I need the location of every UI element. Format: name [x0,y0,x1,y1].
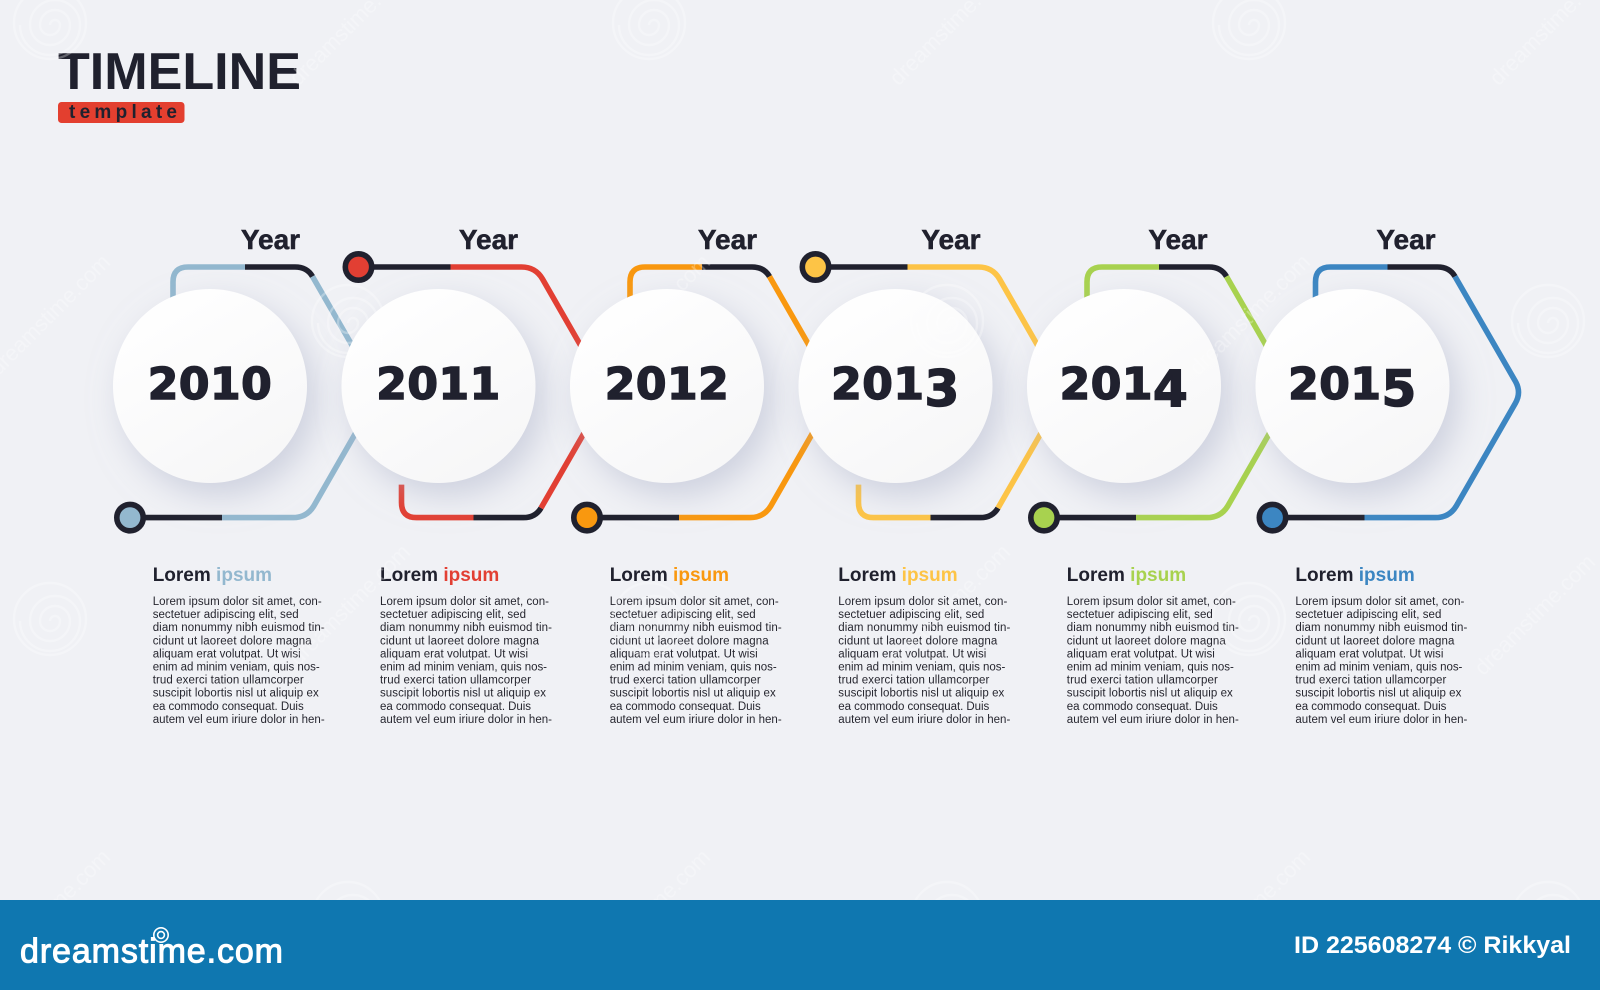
watermark layer: dreamstime.com [1184,249,1315,380]
text block 2011: aliquam erat volutpat. Ut wisi [380,648,528,660]
year disc 2015: 5 [1382,360,1417,418]
subtitle badge: template: template [69,102,177,123]
text block 2015: Lorem ipsum [1295,565,1415,586]
footer bar [0,900,1600,990]
year disc 2011 [342,289,536,483]
text block 2011: sectetuer adipiscing elit, sed [380,609,526,621]
text block 2013: sectetuer adipiscing elit, sed [838,609,984,621]
text block 2012: Lorem ipsum dolor sit amet, con- [610,596,779,608]
year disc 2013: 3 [925,360,960,418]
text block 2011: diam nonummy nibh euismod tin- [380,622,552,634]
year label 4: Year [921,224,981,255]
year label 6: Year [1376,224,1436,255]
text block 2012: suscipit lobortis nisl ut aliquip ex [610,688,776,700]
text block 2012 [610,565,782,726]
text block 2011: Lorem ipsum dolor sit amet, con- [380,596,549,608]
text block 2013: enim ad minim veniam, quis nos- [838,662,1005,674]
text block 2011: trud exerci tation ullamcorper [380,675,531,687]
text block 2013: suscipit lobortis nisl ut aliquip ex [838,688,1005,700]
text block 2011: autem vel eum iriure dolor in hen- [380,714,552,726]
text block 2015: trud exerci tation ullamcorper [1295,675,1447,687]
text block 2014: aliquam erat volutpat. Ut wisi [1067,648,1215,660]
year disc 2010 [113,289,307,483]
year disc 2012 [570,289,764,483]
text block 2013: autem vel eum iriure dolor in hen- [838,714,1010,726]
text block 2010: ea commodo consequat. Duis [153,701,304,713]
connector 2015 with arrow tip [1259,267,1518,531]
text block 2015: autem vel eum iriure dolor in hen- [1295,714,1468,726]
year disc 2014: 201 [1060,359,1153,410]
text block 2013: diam nonummy nibh euismod tin- [838,622,1010,634]
text block 2015: cidunt ut laoreet dolore magna [1295,635,1455,647]
year label 5: Year [1148,224,1208,255]
text block 2010: enim ad minim veniam, quis nos- [153,662,320,674]
text block 2013: ea commodo consequat. Duis [838,701,990,713]
text block 2010: Lorem ipsum [153,565,272,586]
year disc 2010: 2010 [148,359,272,410]
year disc 2012: 2012 [605,359,729,410]
text block 2010: trud exerci tation ullamcorper [153,675,304,687]
year disc 2013: 201 [831,359,925,410]
watermark layer: dreamstime.com [284,539,415,670]
text block 2015 [1295,565,1468,726]
text block 2015: suscipit lobortis nisl ut aliquip ex [1295,688,1462,700]
text block 2014: Lorem ipsum [1067,565,1186,586]
text block 2013: aliquam erat volutpat. Ut wisi [838,648,986,660]
connector 2014 [1031,267,1293,531]
text block 2014: sectetuer adipiscing elit, sed [1067,609,1213,621]
text block 2014 [1067,565,1239,726]
text block 2010: Lorem ipsum dolor sit amet, con- [153,596,322,608]
footer logo: dreamstime.com: dreamstime.com [20,932,283,970]
text block 2015: sectetuer adipiscing elit, sed [1295,609,1441,621]
watermark layer: dreamstime.com [1184,844,1315,975]
text block 2014: diam nonummy nibh euismod tin- [1067,622,1239,634]
text block 2011 [380,565,552,726]
text block 2011: cidunt ut laoreet dolore magna [380,635,540,647]
text block 2013: trud exerci tation ullamcorper [838,675,989,687]
text block 2011: suscipit lobortis nisl ut aliquip ex [380,688,546,700]
text block 2010: autem vel eum iriure dolor in hen- [153,714,325,726]
year disc 2011: 2011 [376,359,501,410]
text block 2013: Lorem ipsum [838,565,958,586]
text block 2013: Lorem ipsum dolor sit amet, con- [838,596,1007,608]
text block 2014: suscipit lobortis nisl ut aliquip ex [1067,688,1233,700]
text block 2015: Lorem ipsum dolor sit amet, con- [1295,596,1465,608]
connector 2012 [574,267,836,531]
text block 2011: ea commodo consequat. Duis [380,701,531,713]
year disc 2014: 4 [1153,360,1188,418]
text block 2014: cidunt ut laoreet dolore magna [1067,635,1226,647]
text block 2012: diam nonummy nibh euismod tin- [610,622,782,634]
text block 2011: Lorem ipsum [380,565,499,586]
text block 2013: cidunt ut laoreet dolore magna [838,635,998,647]
text block 2010: diam nonummy nibh euismod tin- [153,622,325,634]
watermark layer: dreamstime.com [584,249,715,380]
year label 1: Year [241,224,300,255]
text block 2010: aliquam erat volutpat. Ut wisi [153,648,301,660]
text block 2012: Lorem ipsum [610,565,729,586]
text block 2014: ea commodo consequat. Duis [1067,701,1218,713]
text block 2012: ea commodo consequat. Duis [610,701,761,713]
watermark layer: dreamstime.com [1469,549,1600,680]
year disc 2015 [1256,289,1450,483]
text block 2014: enim ad minim veniam, quis nos- [1067,662,1234,674]
text block 2010: cidunt ut laoreet dolore magna [153,635,312,647]
text block 2015: enim ad minim veniam, quis nos- [1295,662,1463,674]
text block 2012: trud exerci tation ullamcorper [610,675,761,687]
text block 2012: aliquam erat volutpat. Ut wisi [610,648,758,660]
text block 2014: trud exerci tation ullamcorper [1067,675,1218,687]
text block 2014: Lorem ipsum dolor sit amet, con- [1067,596,1236,608]
text block 2014: autem vel eum iriure dolor in hen- [1067,714,1239,726]
year label 3: Year [698,224,757,255]
year label 2: Year [459,224,518,255]
connector 2011 [345,254,608,518]
text block 2010 [153,565,325,726]
title: TIMELINE [58,43,301,101]
connector 2010 [117,267,379,531]
text block 2011: enim ad minim veniam, quis nos- [380,662,547,674]
text block 2013 [838,565,1010,726]
connector 2013 [802,254,1064,518]
watermark layer: dreamstime.com [884,539,1015,670]
year disc 2015: 201 [1288,359,1382,410]
text block 2010: sectetuer adipiscing elit, sed [153,609,299,621]
text block 2012: sectetuer adipiscing elit, sed [610,609,756,621]
text block 2015: aliquam erat volutpat. Ut wisi [1295,648,1443,660]
text block 2015: ea commodo consequat. Duis [1295,701,1447,713]
text block 2012: enim ad minim veniam, quis nos- [610,662,777,674]
year disc 2013 [798,289,992,483]
text block 2012: cidunt ut laoreet dolore magna [610,635,769,647]
text block 2015: diam nonummy nibh euismod tin- [1295,622,1468,634]
watermark layer: dreamstime.com [584,844,715,975]
text block 2010: suscipit lobortis nisl ut aliquip ex [153,688,319,700]
year disc 2014 [1027,289,1221,483]
text block 2012: autem vel eum iriure dolor in hen- [610,714,782,726]
footer credit: ID 225608274 © Rikkyal [1294,932,1571,959]
